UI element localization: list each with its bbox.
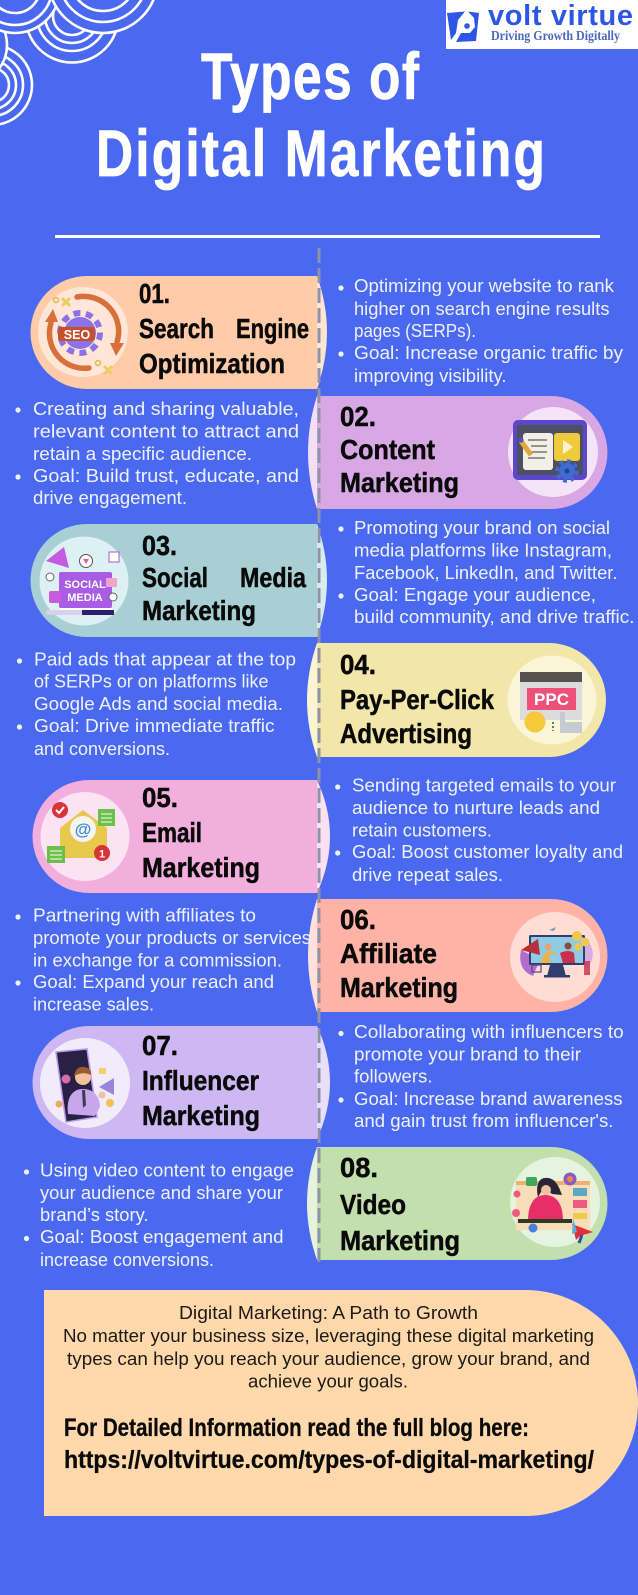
heading 03 bbox=[142, 530, 306, 626]
text: 05 description: Sending targeted emails to your bbox=[352, 775, 616, 796]
heading 04: Pay-Per-Click bbox=[340, 684, 494, 715]
text: 07 description: Collaborating with influencers to bbox=[354, 1021, 624, 1042]
icon: social media laptop: SOCIAL bbox=[64, 579, 106, 591]
heading 04 bbox=[340, 649, 494, 749]
text: 01 description bbox=[338, 275, 624, 386]
text: 05 description bbox=[335, 775, 623, 885]
heading 07: 07. bbox=[142, 1030, 178, 1061]
panel: 03 social media marketing bbox=[31, 524, 327, 637]
text: 03 description: build community, and drive traffic. bbox=[354, 606, 634, 627]
text: 01 description: pages (SERPs). bbox=[354, 320, 476, 341]
logo: volt virtue bbox=[446, 0, 638, 49]
icon: PPC window bbox=[508, 656, 596, 744]
text: 08 description: brand’s story. bbox=[40, 1204, 148, 1225]
text: conclusion paragraph: types can help you reach your audience, grow your brand, and bbox=[67, 1348, 590, 1369]
title: Types of bbox=[201, 39, 419, 113]
text: 07 description: followers. bbox=[354, 1066, 432, 1087]
icon: content tablet bbox=[508, 407, 598, 497]
text: 06 description: Goal: Expand your reach and bbox=[33, 971, 274, 992]
icon: influencer phone bbox=[40, 1038, 130, 1128]
text: 03 description: media platforms like Instagram, bbox=[354, 540, 612, 561]
heading 01: Engine bbox=[236, 313, 309, 344]
heading 08 bbox=[340, 1152, 460, 1256]
heading 08: 08. bbox=[340, 1152, 378, 1183]
text: 08 description: your audience and share your bbox=[40, 1182, 283, 1203]
heading 03: Media bbox=[240, 562, 306, 593]
text: 07 description: promote your brand to their bbox=[354, 1044, 581, 1065]
text: 01 description: Goal: Increase organic traffic by bbox=[354, 342, 624, 363]
text: call to action link: https://voltvirtue.com/types-of-digital-marketing/ bbox=[64, 1446, 594, 1474]
text: 02 description: retain a specific audience. bbox=[33, 443, 252, 464]
text: 08 description: Using video content to engage bbox=[40, 1160, 294, 1181]
heading 01: Search bbox=[139, 313, 214, 344]
icon: SEO gear: SEO bbox=[64, 328, 90, 342]
title divider bbox=[55, 235, 600, 238]
text: conclusion paragraph bbox=[63, 1302, 594, 1392]
heading 07 bbox=[142, 1030, 260, 1131]
panel: 04 pay-per-click advertising bbox=[307, 643, 606, 757]
title: Digital Marketing bbox=[96, 116, 545, 190]
icon: email envelope: 1 bbox=[99, 848, 105, 860]
heading 05: Marketing bbox=[142, 852, 260, 883]
icon: volt virtue mark bbox=[447, 12, 479, 42]
icon: SEO gear bbox=[38, 287, 128, 377]
heading 07: Influencer bbox=[142, 1065, 259, 1096]
logo: volt virtue: Driving Growth Digitally bbox=[491, 28, 620, 43]
text: 07 description: Goal: Increase brand awareness bbox=[354, 1088, 622, 1109]
heading 05: Email bbox=[142, 817, 202, 848]
text: 05 description: retain customers. bbox=[352, 820, 492, 841]
text: 02 description: Goal: Build trust, educate, and bbox=[33, 465, 299, 486]
icon: video presenter bbox=[510, 1157, 600, 1247]
heading 02: 02. bbox=[340, 401, 376, 432]
icon: social media laptop: MEDIA bbox=[67, 592, 103, 604]
panel: 01 search engine optimization bbox=[31, 276, 327, 389]
text: conclusion paragraph: No matter your business size, leveraging these digital marketing bbox=[63, 1325, 594, 1346]
text: 01 description: improving visibility. bbox=[354, 365, 506, 386]
text: 06 description: promote your products or services bbox=[33, 927, 311, 948]
heading 05: 05. bbox=[142, 782, 178, 813]
text: 03 description bbox=[338, 517, 634, 627]
text: 06 description bbox=[15, 905, 311, 1015]
heading 02: Content bbox=[340, 434, 435, 465]
text: 03 description: Goal: Engage your audience, bbox=[354, 584, 596, 605]
text: 05 description: audience to nurture leads and bbox=[352, 797, 600, 818]
text: call to action link: For Detailed Information read the full blog here: bbox=[64, 1414, 529, 1442]
text: conclusion paragraph: Digital Marketing: A Path to Growth bbox=[179, 1302, 478, 1323]
text: 08 description: increase conversions. bbox=[40, 1249, 214, 1270]
heading 05 bbox=[142, 782, 260, 883]
panel: 02 content marketing bbox=[308, 396, 607, 509]
title bbox=[96, 39, 545, 190]
text: 04 description bbox=[17, 649, 296, 759]
text: 02 description: drive engagement. bbox=[33, 487, 187, 508]
text: 05 description: Goal: Boost customer loyalty and bbox=[352, 841, 623, 862]
text: call to action link bbox=[64, 1414, 594, 1474]
text: 06 description: in exchange for a commission. bbox=[33, 950, 282, 971]
heading 01 bbox=[139, 278, 309, 379]
text: 06 description: Partnering with affiliates to bbox=[33, 905, 256, 926]
text: 08 description bbox=[24, 1160, 294, 1270]
heading 06: 06. bbox=[340, 904, 376, 935]
icon: email envelope bbox=[40, 792, 130, 881]
heading 08: Video bbox=[340, 1189, 406, 1220]
icon: PPC window: PPC bbox=[534, 690, 569, 709]
text: 01 description: Optimizing your website to rank bbox=[354, 275, 615, 296]
heading 04: 04. bbox=[340, 649, 376, 680]
text: 02 description: Creating and sharing valuable, bbox=[33, 398, 299, 419]
panel: conclusion bbox=[44, 1290, 638, 1516]
text: 01 description: higher on search engine results bbox=[354, 298, 610, 319]
text: 06 description: increase sales. bbox=[33, 994, 154, 1015]
central dashed timeline bbox=[318, 248, 320, 1262]
panel: 07 influencer marketing bbox=[32, 1026, 330, 1139]
heading 06 bbox=[340, 904, 458, 1003]
text: 03 description: Promoting your brand on social bbox=[354, 517, 610, 538]
panel: 06 affiliate marketing bbox=[308, 899, 608, 1012]
panel: 08 video marketing bbox=[307, 1147, 608, 1260]
text: 04 description: Goal: Drive immediate traffic bbox=[34, 715, 275, 736]
text: 04 description: and conversions. bbox=[34, 738, 170, 759]
heading 02: Marketing bbox=[340, 467, 459, 498]
icon: social media laptop bbox=[40, 536, 128, 626]
icon: email envelope: @ bbox=[75, 820, 91, 839]
text: 02 description bbox=[15, 398, 299, 508]
heading 04: Advertising bbox=[340, 718, 472, 749]
heading 03: 03. bbox=[142, 530, 177, 561]
heading 03: Social bbox=[142, 562, 208, 593]
text: 08 description: Goal: Boost engagement and bbox=[40, 1226, 284, 1247]
panel: 05 email marketing bbox=[32, 780, 330, 893]
text: conclusion paragraph: achieve your goals. bbox=[248, 1371, 408, 1392]
text: 04 description: of SERPs or on platforms like bbox=[34, 671, 268, 692]
heading 01: Optimization bbox=[139, 348, 285, 379]
text: 04 description: Paid ads that appear at the top bbox=[34, 649, 296, 670]
heading 06: Marketing bbox=[340, 972, 458, 1003]
heading 02 bbox=[340, 401, 459, 498]
heading 03: Marketing bbox=[142, 595, 256, 626]
text: 02 description: relevant content to attract and bbox=[33, 420, 299, 442]
text: 04 description: Google Ads and social media. bbox=[34, 693, 283, 714]
text: 07 description: and gain trust from influencer's. bbox=[354, 1110, 614, 1131]
heading 07: Marketing bbox=[142, 1100, 260, 1131]
decorative corner concentric arcs bbox=[0, 0, 158, 125]
logo: volt virtue: volt virtue bbox=[488, 0, 633, 32]
text: 03 description: Facebook, LinkedIn, and Twitter. bbox=[354, 562, 618, 583]
heading 08: Marketing bbox=[340, 1225, 460, 1256]
text: 05 description: drive repeat sales. bbox=[352, 864, 503, 885]
heading 01: 01. bbox=[139, 278, 170, 309]
icon: affiliate monitor bbox=[510, 912, 600, 1002]
text: 07 description bbox=[338, 1021, 624, 1131]
heading 06: Affiliate bbox=[340, 938, 437, 969]
